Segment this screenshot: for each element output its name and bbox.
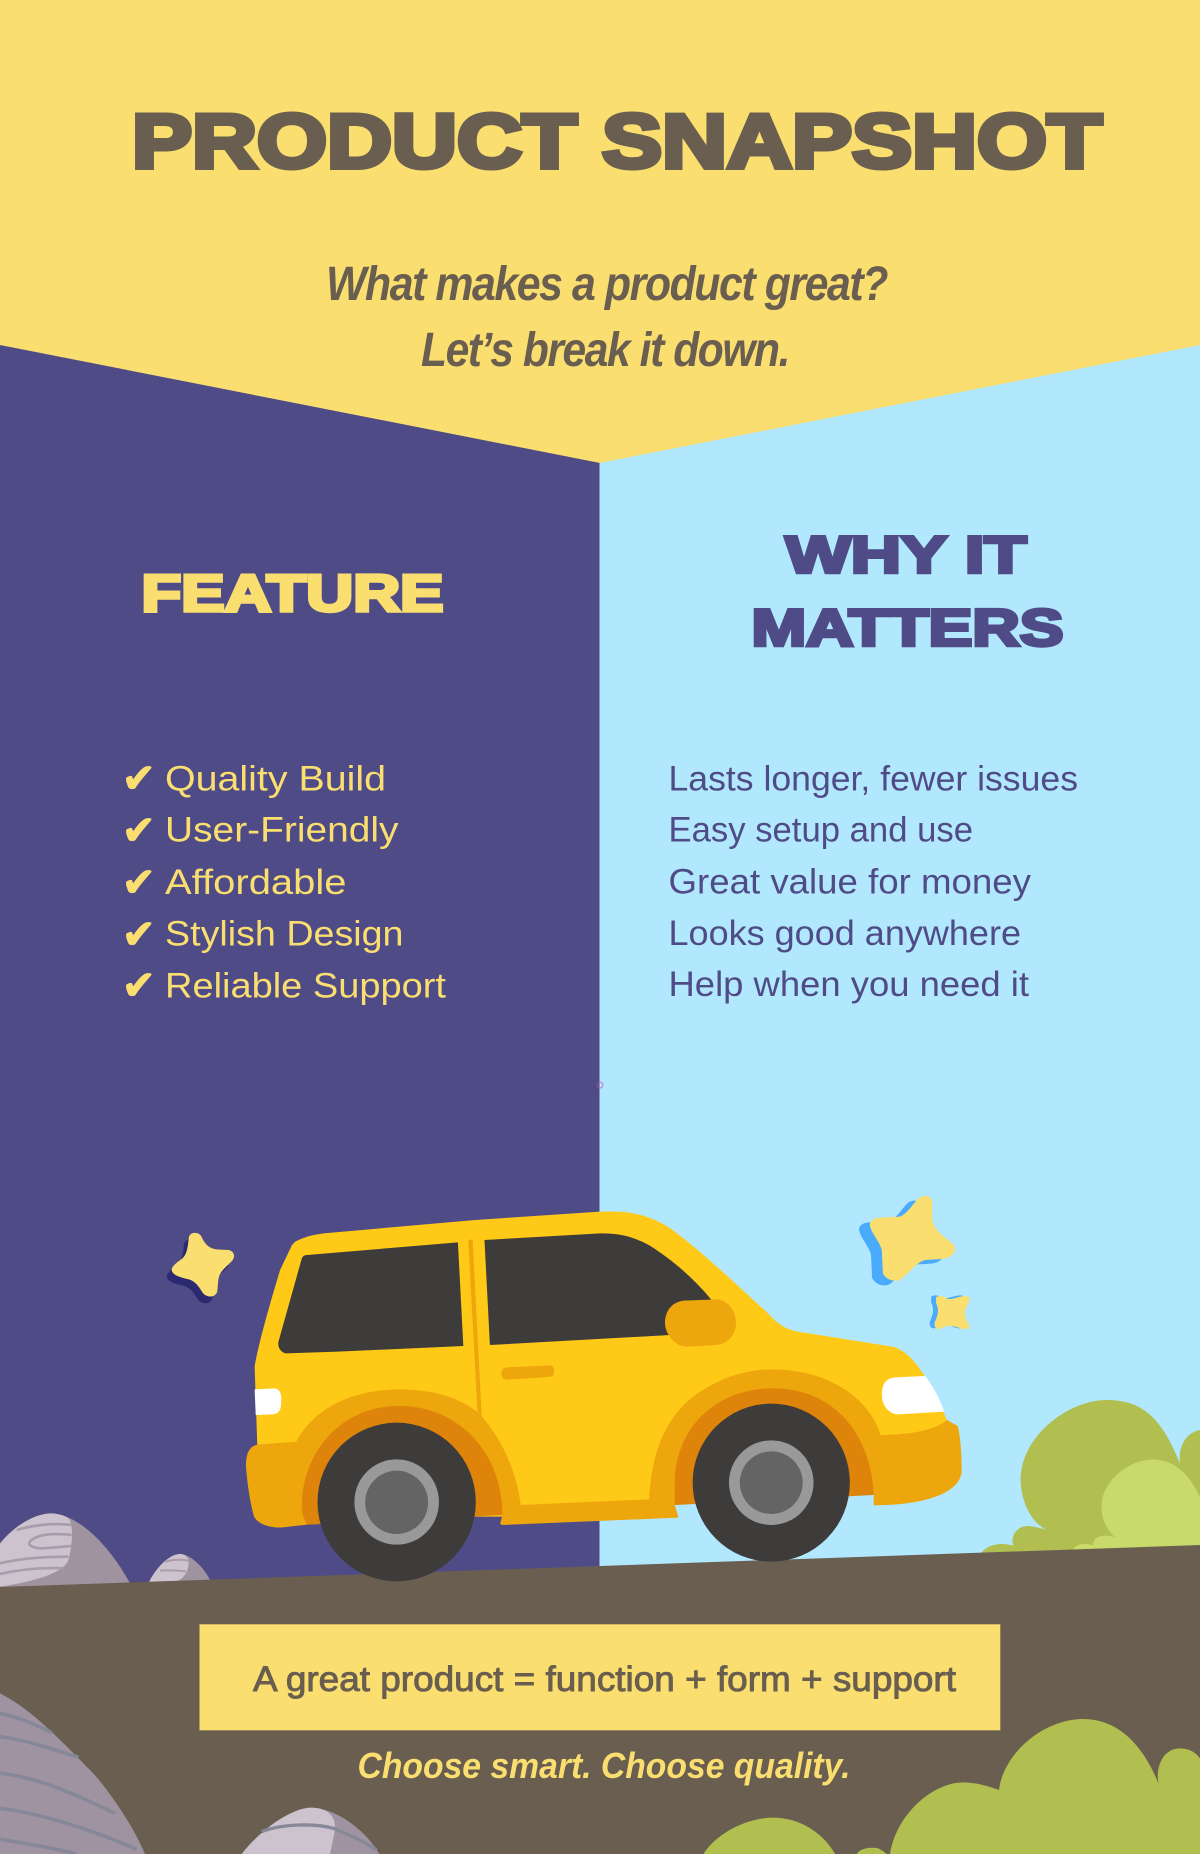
door line xyxy=(468,1239,482,1416)
small marker dot xyxy=(597,1082,603,1088)
icon: upper rocks xyxy=(0,1513,210,1593)
callout box: A great product = function + form + support xyxy=(253,1660,956,1699)
heading: feature: FEATURE xyxy=(142,565,444,623)
heading: why it matters: WHY IT xyxy=(786,526,1027,584)
subtitle xyxy=(326,258,888,377)
front wheel xyxy=(693,1404,850,1562)
benefits list: Great value for money xyxy=(668,862,1032,901)
panel: feature column xyxy=(122,565,446,1008)
feature list: Reliable Support xyxy=(165,966,446,1005)
subtitle: What makes a product great? xyxy=(326,258,888,311)
tagline: Choose smart. Choose quality. xyxy=(358,1745,850,1786)
feature list: ✔ xyxy=(122,964,156,1008)
panel: header background xyxy=(0,0,1200,500)
heading: why it matters: MATTERS xyxy=(752,600,1064,658)
panel: feature background xyxy=(0,345,600,1600)
ground xyxy=(0,1545,1200,1854)
car body xyxy=(255,1211,948,1517)
panel: why it matters column xyxy=(668,526,1078,1004)
feature list: User-Friendly xyxy=(165,811,399,850)
icon: sparkle small right xyxy=(930,1295,970,1329)
car rear window xyxy=(278,1242,463,1353)
benefits list xyxy=(668,760,1078,1004)
feature list: Quality Build xyxy=(165,760,386,799)
subtitle: Let’s break it down. xyxy=(421,324,789,377)
icon: upper bush xyxy=(982,1400,1200,1560)
feature list xyxy=(122,757,446,1008)
side mirror xyxy=(665,1299,736,1347)
panel: why it matters background xyxy=(600,345,1200,1600)
heading: why it matters xyxy=(752,526,1064,658)
callout box xyxy=(200,1624,1000,1730)
fenders and bumpers xyxy=(246,1369,962,1528)
icon: lower bushes xyxy=(703,1719,1200,1854)
feature list: ✔ xyxy=(122,809,156,853)
rear wheel xyxy=(318,1423,476,1581)
icon: sparkle large right xyxy=(859,1196,955,1285)
icon: sparkle left xyxy=(167,1233,234,1303)
benefits list: Looks good anywhere xyxy=(668,914,1021,953)
rear wheel arch xyxy=(302,1406,502,1525)
door handle xyxy=(501,1365,554,1380)
front wheel arch xyxy=(675,1388,874,1505)
feature list: Affordable xyxy=(165,863,346,902)
benefits list: Easy setup and use xyxy=(668,811,973,850)
tail light xyxy=(255,1388,281,1415)
feature list: Stylish Design xyxy=(165,915,404,954)
feature list: ✔ xyxy=(122,757,156,801)
car front window xyxy=(484,1233,711,1345)
feature list: ✔ xyxy=(122,861,156,905)
feature list: ✔ xyxy=(122,913,156,957)
title: PRODUCT SNAPSHOT xyxy=(132,100,1102,184)
icon: yellow car xyxy=(246,1211,962,1581)
icon: lower rocks xyxy=(0,1693,379,1854)
benefits list: Lasts longer, fewer issues xyxy=(668,760,1078,799)
headlight xyxy=(882,1376,944,1414)
benefits list: Help when you need it xyxy=(668,965,1029,1004)
